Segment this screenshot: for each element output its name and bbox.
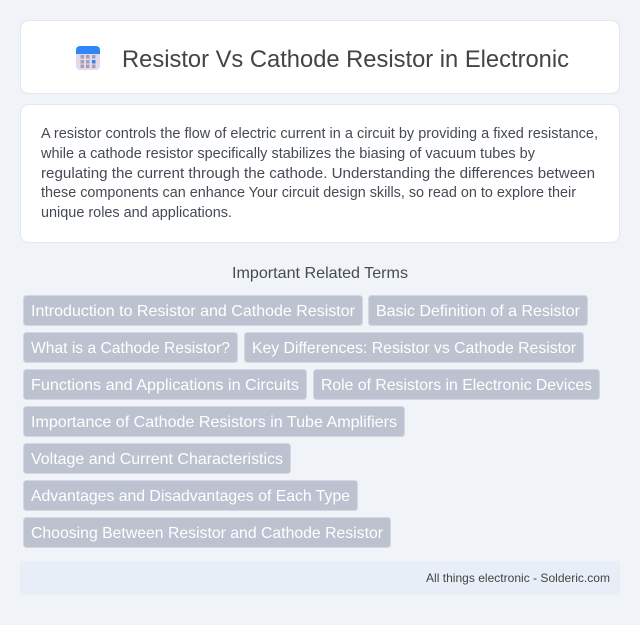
term chips — [24, 296, 600, 548]
chip: what is — [24, 332, 238, 362]
chip: functions — [24, 370, 306, 400]
chip: voltage: Voltage and Current Characteristics — [31, 451, 283, 468]
chip: introduction: Introduction to Resistor and Cathode Resistor — [31, 303, 356, 320]
text block: summary paragraph: regulating the current through the cathode. Understanding the differences between — [41, 166, 595, 182]
chip: voltage — [24, 444, 290, 474]
chip: key differences: Key Differences: Resistor vs Cathode Resistor — [252, 340, 577, 357]
panel: summary — [20, 104, 620, 242]
chip: basic definition — [368, 296, 588, 326]
title: Resistor Vs Cathode Resistor in Electronic — [122, 46, 569, 73]
text block: summary paragraph — [40, 126, 598, 221]
footer — [20, 561, 620, 595]
chip: role: Role of Resistors in Electronic Devices — [321, 377, 592, 394]
chip: advantages — [24, 480, 358, 510]
text block: summary paragraph: unique roles and applications. — [41, 205, 232, 221]
chip: choosing — [24, 518, 390, 548]
chip: key differences — [244, 332, 584, 362]
chip: introduction — [24, 296, 362, 326]
chip: choosing: Choosing Between Resistor and Cathode Resistor — [31, 525, 384, 542]
text block: summary paragraph: A resistor controls the flow of electric current in a circuit by providing a fixed resistance, — [41, 126, 598, 142]
footer credit: All things electronic - Solderic.com — [426, 571, 610, 585]
chip: basic definition: Basic Definition of a Resistor — [376, 303, 581, 320]
chip: advantages: Advantages and Disadvantages of Each Type — [31, 488, 350, 505]
chip: importance: Importance of Cathode Resistors in Tube Amplifiers — [31, 414, 397, 431]
chip: role — [314, 370, 600, 400]
text block: summary paragraph: while a cathode resistor specifically stabilizes the biasing of vacuum tubes by — [40, 146, 536, 162]
header panel — [20, 20, 620, 94]
heading: important related terms: Important Related Terms — [232, 265, 408, 282]
chip: importance — [24, 406, 404, 436]
chip: what is: What is a Cathode Resistor? — [31, 340, 230, 357]
text block: summary paragraph: these components can enhance Your circuit design skills, so read on to explore their — [41, 185, 576, 201]
icon: calendar — [76, 46, 100, 70]
chip: functions: Functions and Applications in Circuits — [31, 377, 299, 394]
